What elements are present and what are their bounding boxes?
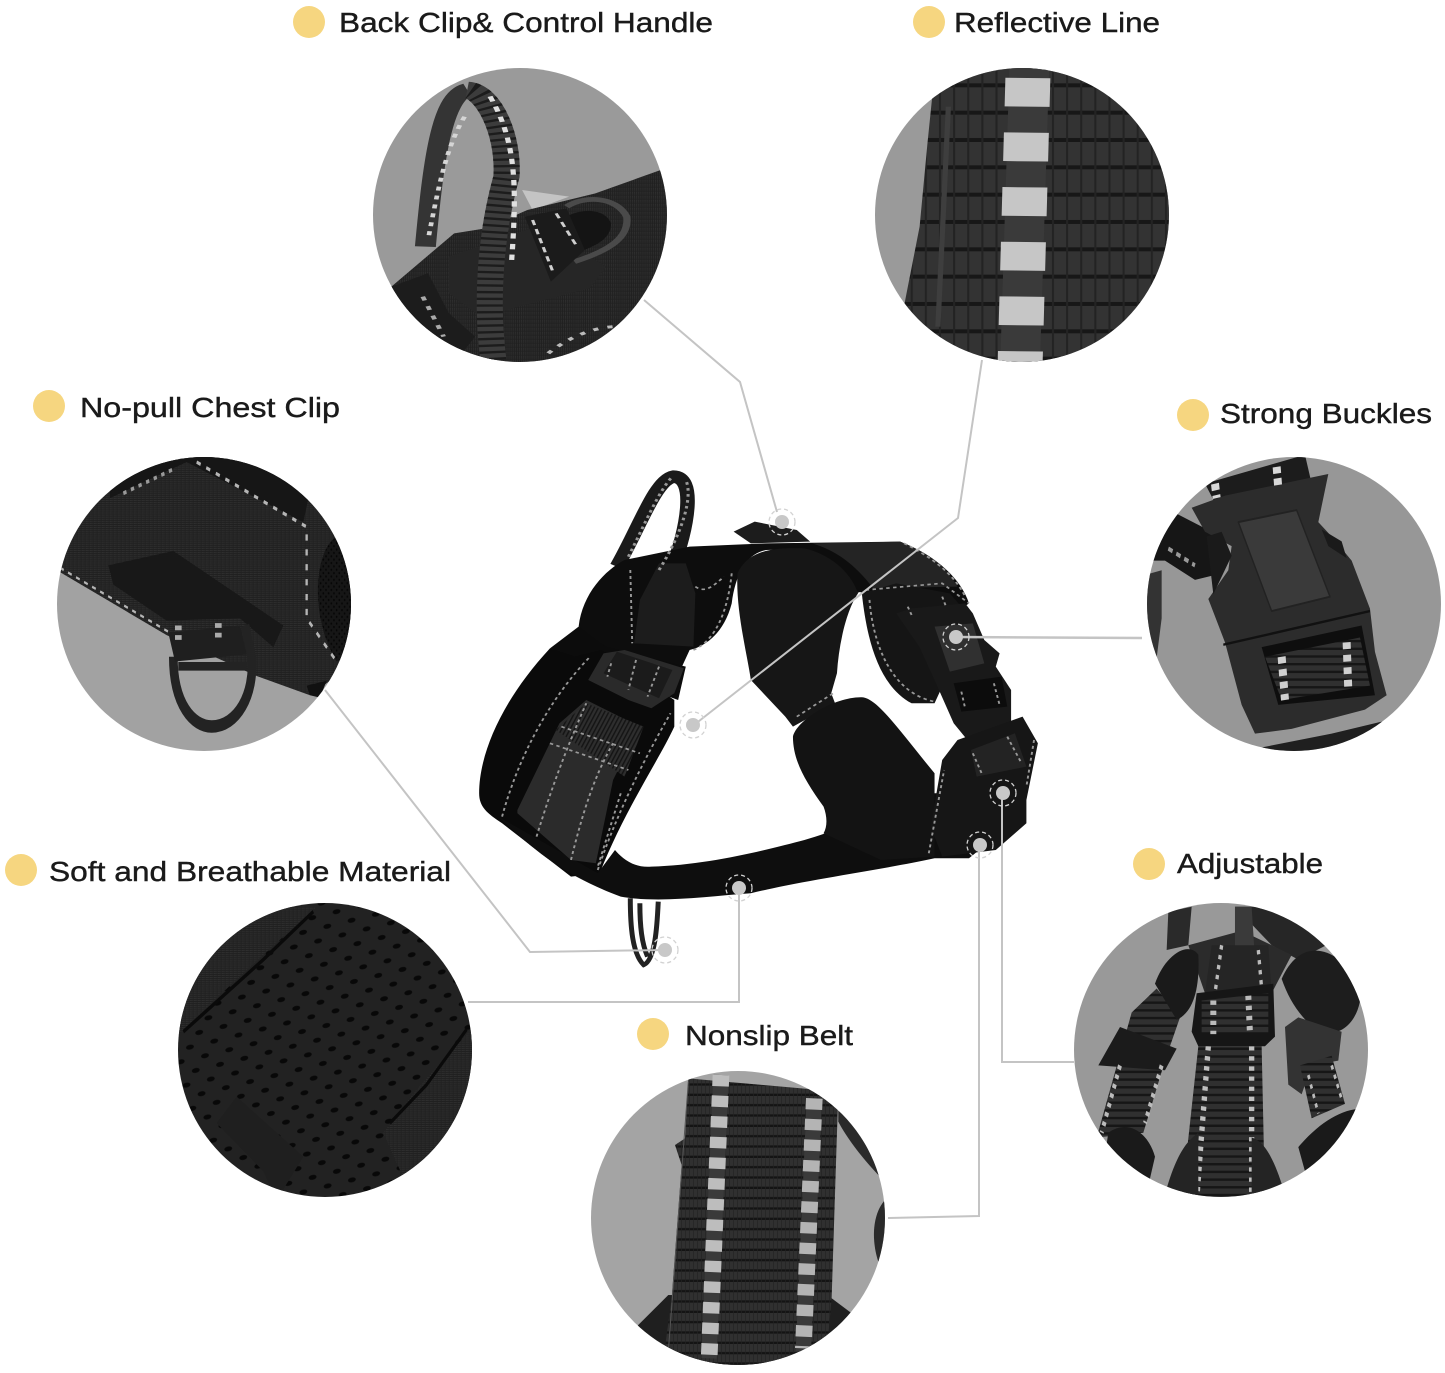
right triangular pad (793, 697, 935, 860)
label text: Adjustable (1177, 848, 1323, 879)
callout marker: back clip (769, 509, 795, 535)
label: No-pull Chest Clip (33, 390, 340, 423)
leader line: soft material (468, 888, 739, 1002)
detail circle: adjustable (1070, 900, 1370, 1200)
bullet (913, 6, 945, 38)
strap joining chest pad to upper pad (550, 627, 686, 700)
label: Back Clip & Control Handle (293, 6, 713, 38)
leader line: chest clip (325, 690, 665, 952)
label text: Strong Buckles (1220, 398, 1432, 429)
bullet (637, 1018, 669, 1050)
lower carabiner (630, 898, 658, 965)
callout marker: nonslip belt (967, 832, 993, 858)
label text: Reflective Line (954, 7, 1160, 38)
label text: Soft and Breathable Material (49, 856, 451, 887)
top yoke panel (812, 542, 958, 588)
belly band (498, 793, 996, 899)
left slider buckle (588, 650, 684, 708)
bullet (1133, 848, 1165, 880)
callout marker: reflective line (680, 712, 706, 738)
upper left pad (579, 542, 969, 667)
leader line: strong buckles (956, 637, 1142, 638)
leader line: adjustable (1002, 793, 1074, 1062)
handle base strap (634, 563, 695, 647)
label: Adjustable (1133, 848, 1323, 880)
label: Reflective Line (913, 6, 1160, 38)
label text: No-pull Chest Clip (80, 392, 340, 423)
detail circle: no-pull chest clip (55, 450, 357, 755)
left chest pad (479, 648, 674, 877)
detail circle: strong buckles (1145, 455, 1445, 767)
label: Nonslip Belt (637, 1018, 853, 1051)
right side pad (862, 583, 973, 703)
bullet (1177, 399, 1209, 431)
harness handle (617, 477, 688, 573)
bullet (5, 854, 37, 886)
label text: Back Clip& Control Handle (339, 7, 713, 38)
callout marker: adjustable (990, 780, 1016, 806)
central harness product image (479, 477, 1038, 965)
callout marker: soft material (726, 875, 752, 901)
label: Soft and Breathable Material (5, 854, 451, 887)
label: Strong Buckles (1177, 398, 1432, 431)
detail circle: nonslip belt (588, 1068, 888, 1372)
reflective stitching (502, 477, 1034, 870)
bullet (293, 6, 325, 38)
callout marker: buckle (943, 624, 969, 650)
center mesh pad (737, 548, 858, 727)
detail circle: back clip and handle (370, 65, 684, 370)
detail circle: reflective line (875, 68, 1169, 362)
leader line: nonslip belt (888, 845, 979, 1218)
lower adjuster (931, 717, 1038, 857)
front webbing panel (517, 700, 640, 863)
back clip (734, 522, 810, 543)
callout marker: chest clip (652, 937, 678, 963)
right side buckle (896, 603, 1011, 747)
leader line: back clip (644, 300, 777, 512)
bullet (33, 390, 65, 422)
detail circle: soft and breathable material (175, 900, 477, 1200)
label text: Nonslip Belt (685, 1020, 853, 1051)
leader line: reflective line (694, 360, 982, 725)
